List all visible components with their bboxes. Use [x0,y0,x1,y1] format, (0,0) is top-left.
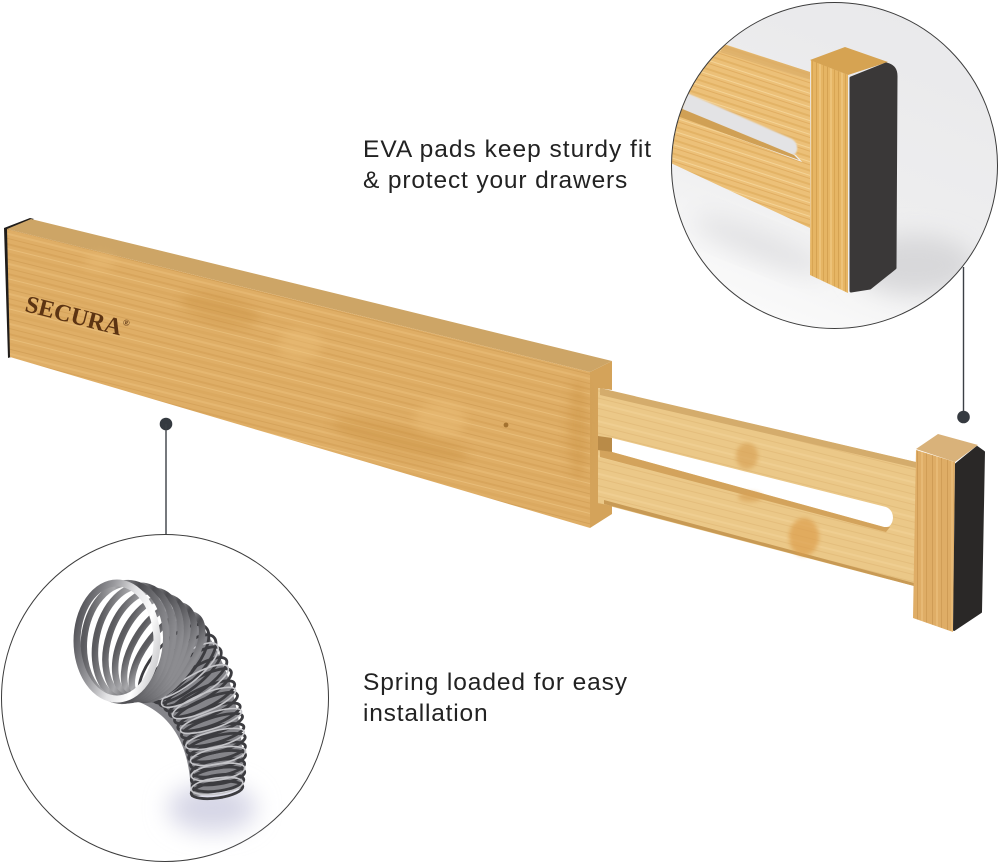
connector line: top circle to end block [957,267,970,423]
close-up photo of divider end [660,34,975,295]
main body front face [7,229,590,528]
end block EVA pad [954,447,984,630]
sliding arms [598,388,916,586]
bamboo nodes on body [84,254,466,438]
brand logo: ® [122,317,131,328]
slot opening [612,438,893,527]
spring shadow [168,784,256,832]
caption: EVA pads line 2: & protect your drawers [363,167,628,194]
panel: spring close-up circle [2,534,328,862]
caption: EVA pads: EVA pads keep sturdy fit [363,136,652,163]
spring body silhouette [130,585,243,797]
main body black pad [4,218,34,358]
end block front [913,450,955,632]
caption: spring loaded line 2: installation [363,700,488,727]
panel: EVA pad close-up circle [660,2,998,328]
connector line: body to spring circle [160,418,172,536]
end block top [916,434,978,462]
brand logo: SECURA [23,292,125,341]
main body top face [7,219,612,372]
caption: spring loaded: Spring loaded for easy [363,669,628,696]
main body end cap [590,361,612,528]
bamboo nodes on arms [736,443,819,556]
product: bamboo drawer divider [4,218,984,632]
icon: metal spring [77,578,247,802]
